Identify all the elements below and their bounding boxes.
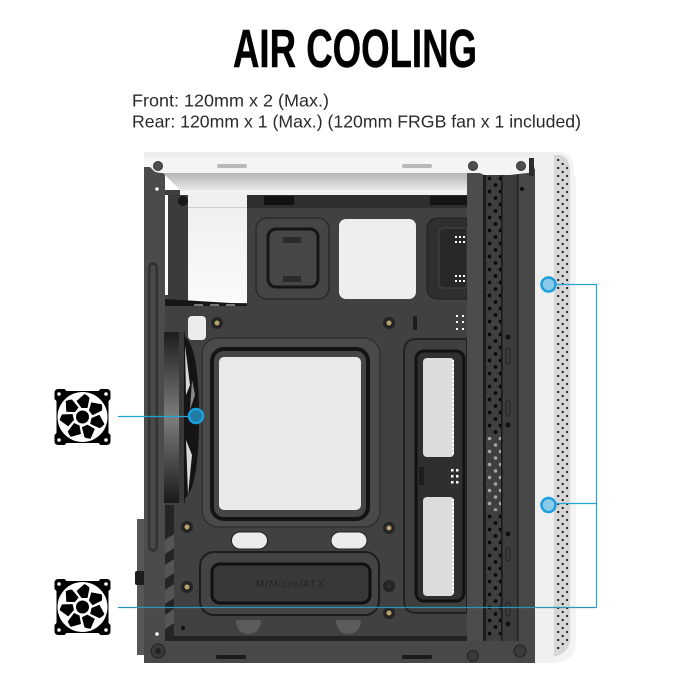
case: white drive bay xyxy=(165,195,247,306)
case: side bump at rear xyxy=(137,519,145,655)
callout dot: front fan bottom xyxy=(542,498,556,512)
case: white front panel xyxy=(535,152,576,663)
callout lines xyxy=(118,284,596,608)
case: square top window xyxy=(339,219,416,299)
case: left rear column xyxy=(144,152,165,663)
title: AIR COOLING xyxy=(233,19,477,79)
case: small rear window xyxy=(188,316,206,340)
case: top embossed panel xyxy=(256,218,329,299)
text block: fan specifications: Front: 120mm x 2 (Max.) xyxy=(132,90,329,110)
case: large square window xyxy=(202,338,380,527)
callout dot: front fan top xyxy=(542,278,556,292)
case: standoff screws xyxy=(181,317,395,630)
callout dot: rear fan xyxy=(189,409,203,423)
case: interior back plate xyxy=(165,190,468,642)
case: right side windows xyxy=(404,315,467,613)
case: rear knob xyxy=(135,571,145,585)
case: half-round tabs xyxy=(236,620,361,634)
icon: fan, front xyxy=(54,579,110,635)
icon: fan, rear xyxy=(54,389,110,445)
case: right pillars with perforation xyxy=(467,165,535,641)
case: bottom rail xyxy=(144,636,535,663)
case: top inner white shelf xyxy=(163,173,467,208)
case: right embossed panel xyxy=(427,218,467,299)
case: rear fan xyxy=(164,332,199,503)
case: bottom embossed panel with label xyxy=(200,552,379,615)
case: oval cable holes xyxy=(232,532,367,549)
case: bottom embossed panel with label: M/Micro/ATX xyxy=(256,579,324,590)
PC case xyxy=(135,152,576,663)
case: top white bar xyxy=(144,152,535,176)
text block: fan specifications xyxy=(132,90,581,132)
text block: fan specifications: Rear: 120mm x 1 (Max.) (120mm FRGB fan x 1 included) xyxy=(132,112,581,132)
